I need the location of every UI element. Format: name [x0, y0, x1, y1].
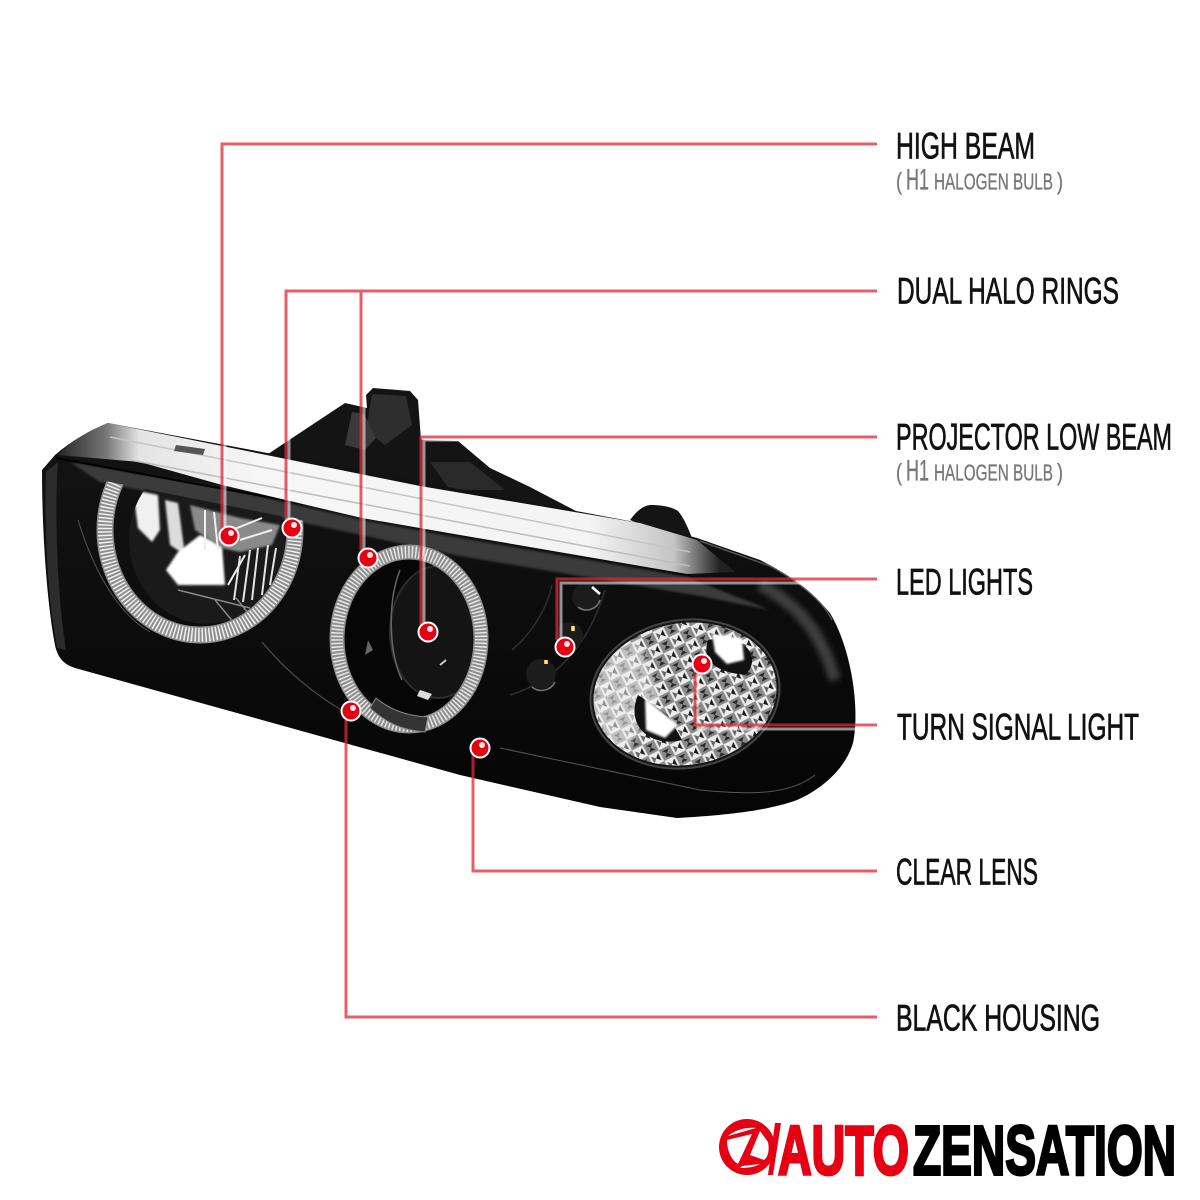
label: led lights: LED LIGHTS [896, 562, 1033, 602]
logo icon [719, 1119, 781, 1175]
turn signal light [590, 618, 780, 770]
center projector section [337, 552, 486, 732]
ring [96, 481, 304, 644]
sublabel: h1 halogen bulb [896, 454, 1063, 488]
led lights [510, 583, 605, 695]
label: high beam [896, 126, 1063, 196]
leader line: dual halo rings [286, 291, 877, 550]
grey band below strip [70, 462, 770, 610]
leader line: turn signal light [695, 670, 877, 729]
left edge highlight [45, 462, 66, 650]
sublabel: h1 halogen bulb: H1 [906, 164, 929, 196]
sublabel: h1 halogen bulb: ( [896, 460, 902, 486]
strip label tag [174, 445, 205, 455]
sublabel: h1 halogen bulb: ( [896, 168, 902, 196]
rear housing and mounting brackets [265, 388, 692, 538]
label: clear lens: CLEAR LENS [896, 852, 1038, 892]
reflector [129, 489, 285, 624]
leader line: high beam [222, 144, 877, 532]
sublabel: h1 halogen bulb: ) [1057, 460, 1063, 486]
logo text auto: AUTO [778, 1112, 909, 1190]
marker dots [218, 518, 712, 758]
leader line: clear lens [473, 755, 877, 871]
label: black housing: BLACK HOUSING [896, 998, 1100, 1038]
thin contour lines [78, 520, 815, 793]
left halo section [96, 481, 304, 644]
leader line: black housing [346, 720, 877, 1017]
label: high beam: HIGH BEAM [896, 126, 1035, 166]
sublabel: h1 halogen bulb: H1 [906, 454, 929, 488]
projector ring [337, 552, 481, 726]
sublabel: h1 halogen bulb: HALOGEN BULB [934, 460, 1053, 486]
sublabel: h1 halogen bulb [896, 164, 1063, 196]
leader line: led lights [557, 579, 877, 640]
leader line: projector low beam [421, 437, 877, 625]
logo: autozensation [719, 1112, 1176, 1190]
sublabel: h1 halogen bulb: HALOGEN BULB [934, 168, 1053, 194]
lens body [42, 423, 855, 818]
sublabel: h1 halogen bulb: ) [1057, 168, 1063, 196]
label: projector low beam [896, 416, 1172, 488]
right fender highlight [760, 585, 835, 680]
headlight product [42, 388, 855, 818]
chrome top strip [58, 423, 735, 574]
